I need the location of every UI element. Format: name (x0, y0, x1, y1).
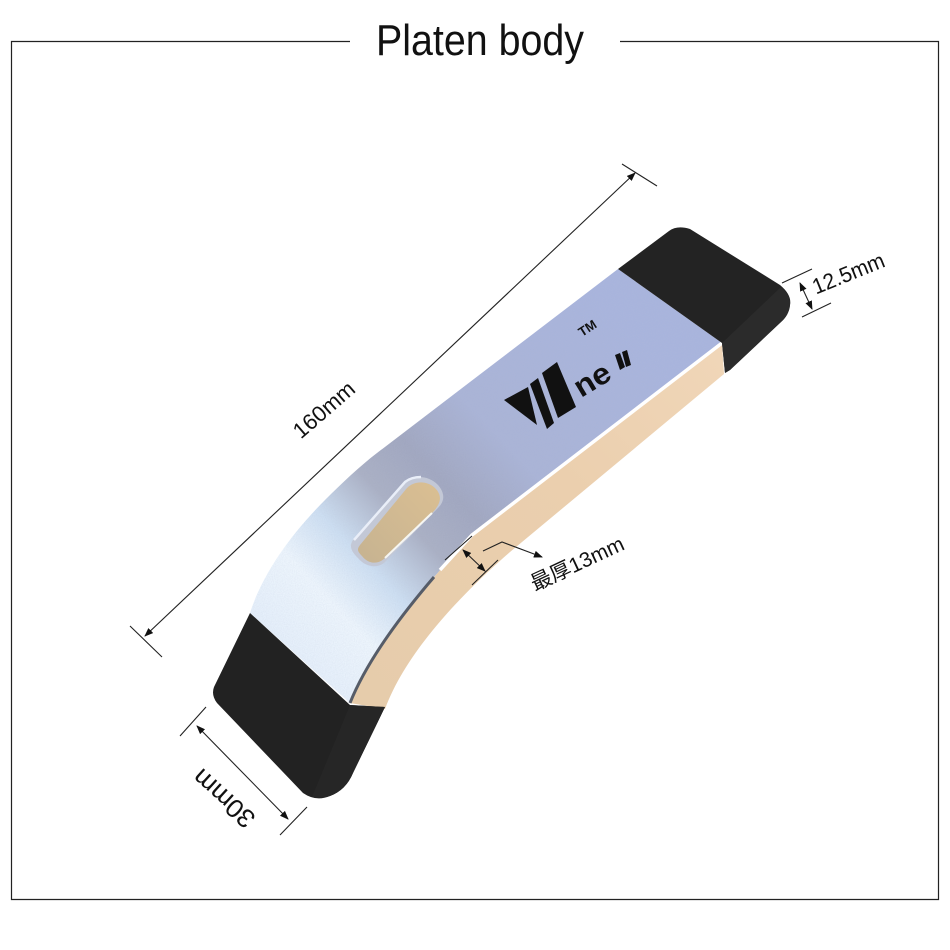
dimension: thickest 13mm: 最厚13mm (527, 533, 628, 596)
dimension: 12.5mm height (782, 248, 888, 317)
product illustration: platen body (213, 227, 790, 798)
title: Platen body (376, 16, 584, 65)
dimension: 160mm length: 160mm (288, 376, 360, 443)
metal top face (250, 269, 722, 703)
dimension: 160mm length (130, 164, 657, 657)
tan side face (350, 343, 724, 709)
dimension: thickest 13mm (445, 533, 628, 596)
black rubber cap: bottom end (213, 613, 385, 798)
dark bevel along curved metal edge (350, 577, 434, 703)
brand logo (504, 317, 631, 429)
dimension: 30mm width (180, 707, 307, 835)
brand logo: TM (575, 317, 599, 340)
black rubber cap: top end (618, 227, 790, 373)
white highlight along metal edge (440, 343, 722, 570)
dimension: 30mm width: 30mm (186, 763, 261, 834)
dimension: 12.5mm height: 12.5mm (808, 248, 888, 299)
slot in metal (351, 477, 443, 566)
brand logo: ne (568, 356, 617, 404)
